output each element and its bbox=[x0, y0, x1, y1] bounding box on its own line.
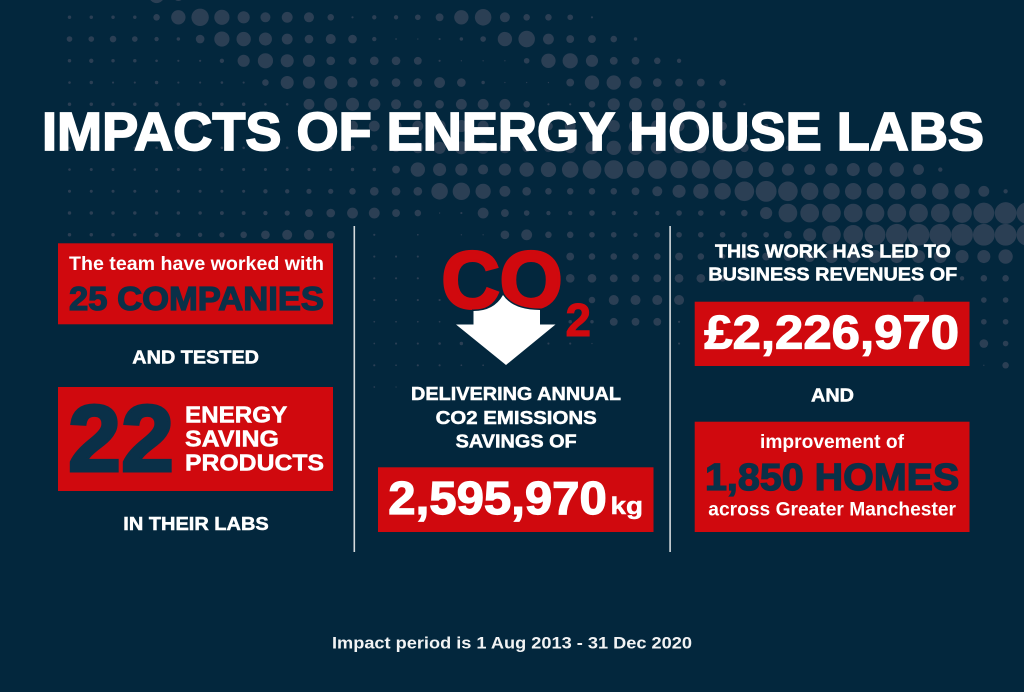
callout: 2,595,970 kg: 2,595,970 bbox=[388, 472, 607, 524]
callout: 25 companies: 25 COMPANIES bbox=[69, 281, 324, 318]
panel: CO2 savings bbox=[378, 236, 654, 532]
callout: 22 energy saving products: PRODUCTS bbox=[185, 450, 324, 476]
text: delivering annual CO2 emissions savings of: DELIVERING ANNUAL bbox=[411, 383, 621, 404]
callout: 22 energy saving products: ENERGY bbox=[185, 401, 287, 427]
callout: 2,595,970 kg: kg bbox=[610, 493, 643, 520]
footer note: Impact period is 1 Aug 2013 - 31 Dec 2020 bbox=[332, 634, 692, 652]
text: this work has led to business revenues of: THIS WORK HAS LED TO bbox=[715, 240, 951, 261]
text: in their labs: IN THEIR LABS bbox=[123, 513, 269, 534]
title: IMPACTS OF ENERGY HOUSE LABS bbox=[42, 102, 984, 162]
text: this work has led to business revenues of: BUSINESS REVENUES OF bbox=[708, 264, 957, 285]
text: delivering annual CO2 emissions savings of bbox=[411, 383, 621, 451]
icon: CO2 with down arrow bbox=[442, 236, 591, 365]
text: delivering annual CO2 emissions savings of: SAVINGS OF bbox=[456, 430, 577, 451]
callout: 22 energy saving products bbox=[58, 386, 333, 492]
callout: 1,850 homes: improvement of bbox=[760, 431, 904, 453]
callout: 22 energy saving products: 22 bbox=[68, 386, 174, 492]
callout: 2,595,970 kg bbox=[378, 467, 654, 532]
callout: 25 companies: The team have worked with bbox=[69, 253, 324, 275]
background dot pattern bbox=[67, 0, 1024, 388]
text: delivering annual CO2 emissions savings of: CO2 EMISSIONS bbox=[436, 407, 597, 428]
right divider bbox=[669, 226, 671, 552]
left divider bbox=[354, 226, 355, 552]
icon: CO2 with down arrow: CO bbox=[442, 236, 562, 326]
panel: revenues and homes bbox=[695, 240, 970, 532]
panel: companies and products bbox=[58, 243, 333, 534]
callout: revenue figure: £2,226,970 bbox=[704, 305, 959, 358]
callout: 25 companies bbox=[58, 243, 333, 324]
callout: 1,850 homes: across Greater Manchester bbox=[708, 500, 957, 521]
text: and: AND bbox=[811, 385, 854, 406]
callout: 22 energy saving products: SAVING bbox=[185, 426, 279, 452]
callout: 1,850 homes: 1,850 HOMES bbox=[705, 457, 959, 499]
text: this work has led to business revenues of bbox=[708, 240, 957, 285]
text: and tested: AND TESTED bbox=[132, 346, 259, 367]
callout: 1,850 homes bbox=[695, 422, 970, 532]
icon: CO2 with down arrow: 2 bbox=[566, 294, 591, 346]
